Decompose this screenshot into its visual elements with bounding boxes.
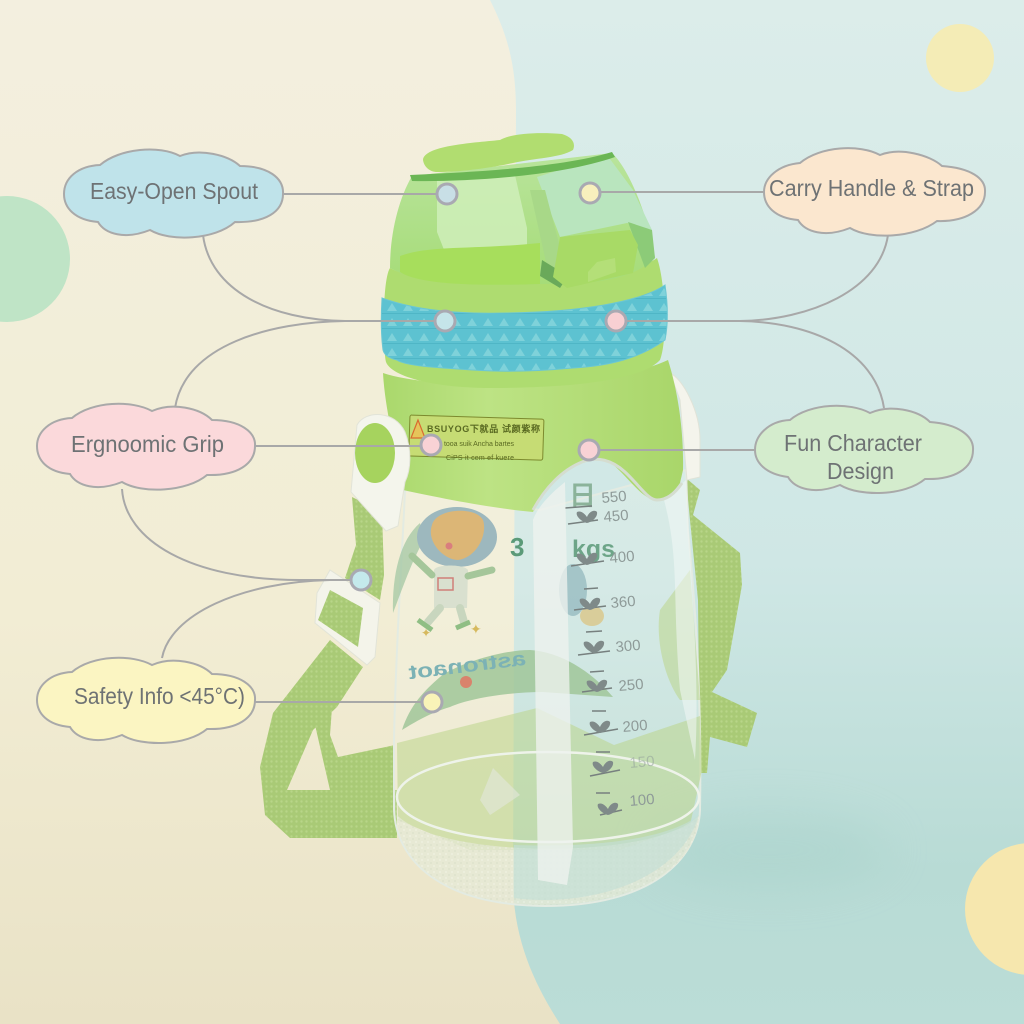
callout: Fun Character Design <box>755 406 973 493</box>
callout: Carry Handle & Strap: Carry Handle & Strap <box>769 175 974 201</box>
warning label: CiPS it cem ef kuere <box>446 455 514 462</box>
left strap mount and button <box>351 415 410 531</box>
measurement scale: 360 <box>610 593 636 612</box>
lower shoulder of cap <box>383 360 683 512</box>
measurement scale: 250 <box>618 676 644 695</box>
measurement scale: 300 <box>615 637 641 656</box>
measurement scale: 100 <box>629 791 655 810</box>
silicone grip band <box>381 285 667 371</box>
arch trim of handle <box>533 459 682 510</box>
measurement scale: 550 <box>601 488 627 507</box>
measurement scale: 400 <box>609 548 635 567</box>
warning label: tooa suik Ancha bartes <box>444 441 514 448</box>
callout: Safety Info <box>37 658 255 743</box>
callout: Safety Info: Safety Info <45°C) <box>74 683 245 709</box>
callout: Fun Character Design: Fun Character <box>784 430 922 456</box>
measurement scale: 200 <box>622 717 648 736</box>
straw handle <box>533 482 573 885</box>
marker: strap <box>351 570 371 590</box>
decorative circle: green left <box>0 196 70 322</box>
mirrored print text: astronaot <box>407 648 527 684</box>
strap: webbing <box>260 478 757 838</box>
callout: Easy-Open Spout <box>64 150 283 238</box>
decorative circle: yellow top right <box>926 24 994 92</box>
callout: Ergonomic Grip <box>37 404 255 490</box>
warning label <box>409 415 544 462</box>
measurement scale: 150 <box>629 753 655 772</box>
glass bottle body <box>394 470 702 906</box>
callout: Ergonomic Grip: Ergnoomic Grip <box>71 431 224 457</box>
callout: Fun Character Design: Design <box>827 458 894 484</box>
mirrored back print: kgs <box>572 536 615 563</box>
mirrored back print: 3 <box>510 532 524 562</box>
marker: safety info <box>422 692 442 712</box>
marker: spout <box>437 184 457 204</box>
callout: Carry Handle & Strap <box>764 148 985 236</box>
marker: character design <box>579 440 599 460</box>
mirrored back print <box>510 481 615 626</box>
collar <box>384 258 665 388</box>
strap seen through glass <box>397 708 702 850</box>
marker: ergonomic grip <box>421 435 441 455</box>
strap buckle <box>315 570 380 665</box>
right strap mount <box>670 373 700 480</box>
lid latch <box>553 230 638 288</box>
character: astronaut dog: ✦ <box>421 626 431 640</box>
translucent lid dome <box>390 152 655 288</box>
warning label: BSUYOG下就品 试颜紫称 <box>427 423 540 434</box>
measurement scale <box>565 488 655 815</box>
green print arc <box>402 650 613 730</box>
decorative circle: yellow bottom right <box>965 843 1024 975</box>
character: astronaut dog: ✦ <box>470 621 482 637</box>
callout: Easy-Open Spout: Easy-Open Spout <box>90 178 259 204</box>
connector lines <box>122 192 888 702</box>
marker: handle <box>580 183 600 203</box>
spout flap <box>423 133 574 172</box>
marker: grip right <box>606 311 626 331</box>
background: blue right panel <box>490 0 1024 1024</box>
marker: grip left <box>435 311 455 331</box>
mirrored back print: 日 <box>569 481 596 511</box>
character: astronaut dog <box>393 507 497 640</box>
ground shadow <box>650 812 890 888</box>
measurement scale: 450 <box>603 507 629 526</box>
